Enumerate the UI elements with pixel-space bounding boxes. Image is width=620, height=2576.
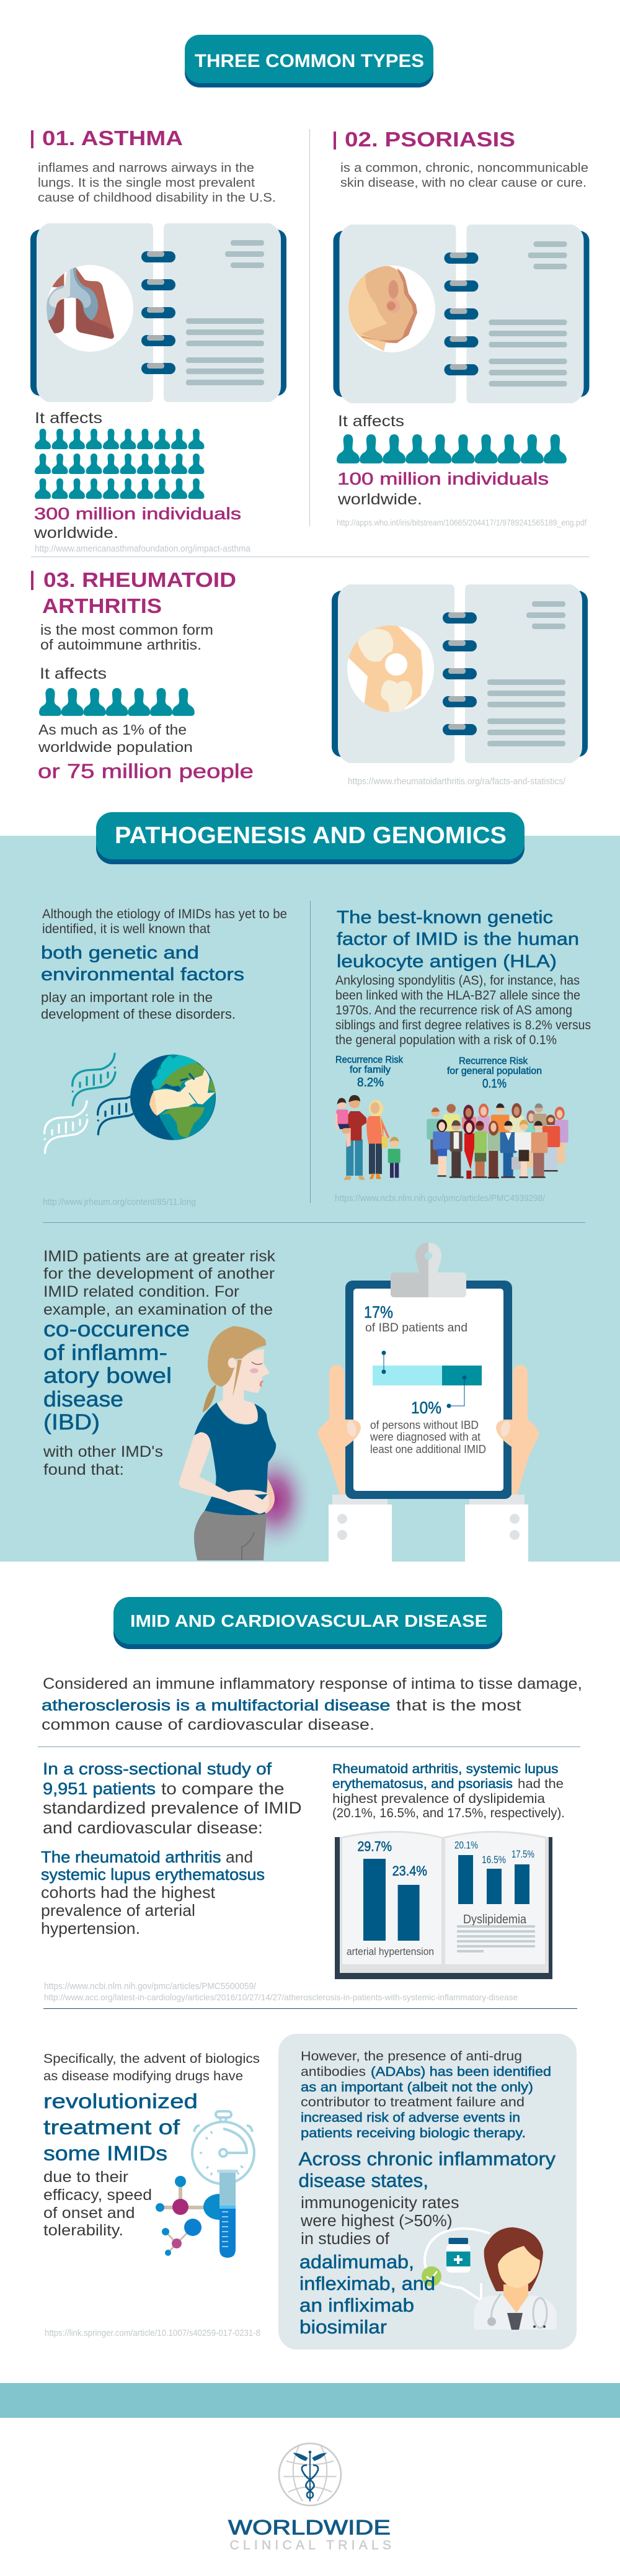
stat: 75 million people: or 75 million people: [38, 760, 254, 782]
text: it affects: It affects: [35, 409, 102, 427]
text: psoriasis description: skin disease, with no clear cause or cure.: [340, 176, 587, 190]
panel: psoriasis: [334, 128, 589, 527]
text: presence of anti-drug antibodies: antibodies: [301, 2065, 366, 2079]
icon row: 7 people: [39, 688, 195, 716]
text: presence of anti-drug antibodies: as an important (albeit not the only): [301, 2080, 533, 2095]
panel: anti-drug antibodies: [278, 2034, 577, 2350]
text block: etiology: both genetic and: [41, 943, 199, 963]
label: recurrence risk for family: Recurrence Risk: [335, 1055, 404, 1065]
text block: atherosclerosis: common cause of cardiovascular disease.: [42, 1716, 374, 1733]
text block: etiology: Although the etiology of IMIDs has yet to be: [42, 907, 287, 921]
text block: co-occurrence of ibd: with other IMD's: [43, 1443, 163, 1460]
source: springer: https://link.springer.com/article/10.1007/s40259-017-0231-8: [45, 2328, 260, 2338]
text block: co-occurrence of ibd: [43, 1248, 276, 1478]
text block: dyslipidemia finding: [332, 1761, 565, 1820]
bars: dyslipidemia: 16.5%: [482, 1854, 506, 1866]
sources: cardiovascular: https://www.ncbi.nlm.nih.gov/pmc/articles/PMC5500059/: [44, 1981, 257, 1992]
text block: biologics: some IMIDs: [43, 2142, 167, 2165]
heading: three common types: [185, 35, 433, 87]
text block: co-occurrence of ibd: IMID related condition. For: [43, 1283, 239, 1300]
text: worldwide: worldwide.: [33, 524, 118, 542]
text block: biologics: efficacy, speed: [43, 2186, 152, 2204]
label: recurrence risk for general population: [447, 1056, 542, 1091]
text block: co-occurrence of ibd: IMID patients are at greater risk: [43, 1248, 276, 1265]
bars: arterial hypertension: 23.4%: [392, 1863, 427, 1879]
icon: globe and caduceus: [279, 2443, 341, 2505]
sources: cardiovascular: http://www.acc.org/latest-in-cardiology/articles/2016/10/27/14/27/atherosclerosis-in-patients-with-systemic-inflammatory-disease: [44, 1992, 518, 2002]
icon: globe with dna strands: [45, 1053, 216, 1153]
source: ncbi hla: https://www.ncbi.nlm.nih.gov/pmc/articles/PMC4939298/: [335, 1193, 546, 1204]
label: recurrence risk for general population: Recurrence Risk: [459, 1056, 528, 1067]
text block: atherosclerosis: [42, 1675, 582, 1733]
text: as much as 1 percent: As much as 1% of the: [38, 722, 187, 738]
icon row: 30 people: [35, 429, 205, 499]
text: arthritis description: [40, 622, 213, 653]
chart: open book with bar charts: [335, 1831, 552, 1979]
text block: hla genetic factor: [335, 908, 591, 1047]
text block: hla genetic factor: factor of IMID is the human: [337, 929, 579, 949]
text block: arterial hypertension finding: hypertension.: [41, 1919, 140, 1938]
stat: 10 percent: 10%: [411, 1398, 441, 1417]
heading: 02 psoriasis: 02. PSORIASIS: [345, 128, 515, 151]
bars: arterial hypertension: [347, 1839, 434, 1957]
text: presence of anti-drug antibodies: (ADAbs) has been identified: [371, 2065, 551, 2079]
stat: 17 percent: 17%: [364, 1303, 393, 1322]
text block: dyslipidemia finding: highest prevalence of dyslipidemia: [332, 1791, 545, 1806]
bar chart: proportion: [373, 1351, 482, 1408]
text: it affects: It affects: [338, 413, 404, 430]
text: asthma description: lungs. It is the single most prevalent: [38, 176, 255, 190]
text block: hla genetic factor: Ankylosing spondylitis (AS), for instance, has: [335, 973, 580, 988]
bars: dyslipidemia: 17.5%: [512, 1848, 534, 1860]
source: jrheum: http://www.jrheum.org/content/85/11.long: [43, 1197, 196, 1207]
text: arthritis description: is the most common form: [40, 622, 213, 638]
panel: rheumatoid arthritis: [31, 568, 588, 787]
panel: asthma: [30, 127, 286, 554]
text block: biologics: of onset and: [43, 2204, 135, 2222]
bars: dyslipidemia: [454, 1839, 535, 1952]
clipboard: [345, 1243, 512, 1499]
text: drug names: infleximab, and: [299, 2273, 435, 2294]
text: it affects: It affects: [40, 665, 107, 682]
text block: biologics: Specifically, the advent of biologics: [43, 2052, 260, 2066]
label: recurrence risk for family: 8.2%: [357, 1076, 384, 1089]
illustration: crowd: [427, 1103, 569, 1179]
text: arthritis description: of autoimmune arthritis.: [40, 637, 202, 653]
label: recurrence risk for family: for family: [350, 1065, 391, 1075]
text: presence of anti-drug antibodies: patients receiving biologic therapy.: [301, 2126, 526, 2140]
illustration: stopwatch and test tube with molecules: [156, 2111, 254, 2258]
text block: atherosclerosis: that is the most: [396, 1697, 521, 1714]
text block: dyslipidemia finding: (20.1%, 16.5%, and 17.5%, respectively).: [332, 1805, 565, 1820]
illustration: woman with abdominal pain: [179, 1326, 314, 1560]
text block: biologics: as disease modifying drugs have: [43, 2069, 243, 2083]
text block: co-occurrence of ibd: atory bowel: [43, 1364, 172, 1388]
text: persons without ibd: of persons without IBD: [370, 1419, 479, 1431]
source: psoriasis: http://apps.who.int/iris/bitstream/10665/204417/1/9789241565189_eng.pdf: [337, 517, 587, 527]
text block: dyslipidemia finding: erythematosus, and psoriasis: [332, 1776, 513, 1791]
heading: imid and cardiovascular disease: [113, 1597, 502, 1649]
icon: notebook with skin: [334, 225, 589, 403]
text: presence of anti-drug antibodies: contributor to treatment failure and: [301, 2095, 525, 2109]
text block: arterial hypertension finding: The rheumatoid arthritis: [41, 1848, 221, 1866]
text: immunogenicity rates: in studies of: [301, 2230, 390, 2248]
text: immunogenicity rates: [300, 2194, 459, 2248]
text: presence of anti-drug antibodies: However, the presence of anti-drug: [301, 2049, 522, 2064]
text block: biologics: tolerability.: [43, 2222, 123, 2239]
text: asthma description: [38, 161, 276, 205]
text block: co-occurrence of ibd: example, an examination of the: [43, 1301, 273, 1318]
text: presence of anti-drug antibodies: increased risk of adverse events in: [301, 2111, 520, 2125]
bars: dyslipidemia: Dyslipidemia: [463, 1913, 527, 1926]
text: across chronic inflammatory disease states: [299, 2148, 556, 2191]
heading: imid and cardiovascular disease: IMID AND CARDIOVASCULAR DISEASE: [130, 1611, 487, 1630]
heading: 03 rheumatoid arthritis: 03. RHEUMATOID: [43, 568, 236, 591]
icon: notebook with lungs: [30, 223, 286, 402]
icon: notebook with knee: [332, 584, 588, 763]
heading: three common types: THREE COMMON TYPES: [195, 51, 424, 71]
text block: arterial hypertension finding: cohorts had the highest: [41, 1883, 216, 1902]
text: across chronic inflammatory disease states: Across chronic inflammatory: [299, 2148, 556, 2170]
heading: pathogenesis and genomics: [96, 812, 525, 864]
text block: arterial hypertension finding: prevalence of arterial: [41, 1901, 195, 1920]
stat: 100 million individuals: 100 million individuals: [337, 469, 549, 488]
heading: pathogenesis and genomics: PATHOGENESIS AND GENOMICS: [115, 823, 507, 849]
text: as much as 1 percent: worldwide population: [38, 739, 193, 755]
text block: hla genetic factor: leukocyte antigen (HLA): [337, 952, 557, 972]
text: worldwide: worldwide.: [337, 491, 422, 508]
label: recurrence risk for general population: 0.1%: [482, 1077, 507, 1091]
text: of ibd patients: of IBD patients and: [365, 1322, 467, 1335]
text block: co-occurrence of ibd: of inflamm-: [43, 1341, 167, 1365]
text block: hla genetic factor: The best-known genetic: [337, 908, 553, 928]
text block: cross-sectional study: and cardiovascular disease:: [43, 1818, 263, 1837]
illustration: hands: [317, 1365, 539, 1495]
text block: arterial hypertension finding: and: [226, 1848, 253, 1866]
text block: cross-sectional study: 9,951 patients: [43, 1779, 156, 1798]
footer band: [0, 2383, 620, 2418]
text: as much as 1 percent: [38, 722, 193, 755]
text: persons without ibd: [370, 1419, 486, 1456]
text block: hla genetic factor: the general population with a risk of 0.1%: [335, 1033, 557, 1047]
icon row: 10 people: [337, 434, 567, 463]
sources: cardiovascular: [44, 1981, 518, 2002]
bars: arterial hypertension: arterial hypertension: [347, 1946, 434, 1957]
text block: biologics: due to their: [43, 2168, 128, 2186]
text block: hla genetic factor: been linked with the HLA-B27 allele since the: [335, 988, 580, 1003]
text block: cross-sectional study: to compare the: [161, 1779, 284, 1798]
heading: 01 asthma: 01. ASTHMA: [42, 127, 183, 150]
text: across chronic inflammatory disease states: disease states,: [299, 2170, 428, 2191]
text block: co-occurrence of ibd: disease: [43, 1387, 123, 1411]
heading: 03 rheumatoid arthritis: ARTHRITIS: [42, 594, 162, 617]
text block: cross-sectional study: [43, 1760, 302, 1837]
text block: cross-sectional study: standardized prevalence of IMID: [43, 1799, 302, 1817]
label: recurrence risk for family: [335, 1055, 404, 1089]
stat: 300 million individuals: 300 million individuals: [34, 504, 241, 523]
text block: etiology: environmental factors: [41, 965, 244, 985]
text: immunogenicity rates: were highest (>50%): [300, 2212, 453, 2230]
text block: cross-sectional study: In a cross-sectional study of: [43, 1760, 272, 1778]
text block: arterial hypertension finding: systemic lupus erythematosus: [41, 1865, 265, 1884]
text: presence of anti-drug antibodies: [301, 2049, 551, 2140]
text: psoriasis description: is a common, chronic, noncommunicable: [340, 161, 588, 175]
text block: etiology: play an important role in the: [41, 990, 213, 1005]
illustration: sleeves holding clipboard: [329, 1495, 528, 1562]
logo: worldwide clinical trials: CLINICAL TRIALS: [229, 2538, 391, 2552]
heading: 03 rheumatoid arthritis: [42, 568, 236, 617]
text block: co-occurrence of ibd: co-occurence: [43, 1317, 190, 1341]
text: asthma description: inflames and narrows airways in the: [38, 161, 254, 175]
text: psoriasis description: [340, 161, 588, 190]
text block: co-occurrence of ibd: found that:: [43, 1461, 124, 1478]
text block: biologics: [43, 2052, 260, 2239]
logo: worldwide clinical trials: WORLDWIDE: [228, 2516, 391, 2539]
text block: hla genetic factor: 1970s. And the recurrence risk of AS among: [335, 1003, 572, 1017]
text: persons without ibd: were diagnosed with at: [370, 1431, 480, 1443]
text: drug names: adalimumab,: [299, 2251, 414, 2273]
text: drug names: [299, 2251, 435, 2338]
text block: etiology: development of these disorders.: [41, 1006, 236, 1022]
text block: co-occurrence of ibd: (IBD): [43, 1410, 100, 1434]
label: recurrence risk for general population: for general population: [447, 1066, 542, 1076]
bars: dyslipidemia: 20.1%: [454, 1839, 478, 1851]
text block: atherosclerosis: atherosclerosis is a multifactorial disease: [42, 1697, 391, 1714]
text block: biologics: revolutionized: [43, 2090, 198, 2113]
text: drug names: biosimilar: [299, 2316, 387, 2338]
text: asthma description: cause of childhood disability in the U.S.: [38, 190, 276, 205]
text: immunogenicity rates: immunogenicity rates: [301, 2194, 459, 2212]
source: asthma: http://www.americanasthmafoundation.org/impact-asthma: [35, 543, 251, 554]
bars: arterial hypertension: 29.7%: [357, 1839, 392, 1854]
text block: biologics: treatment of: [43, 2116, 180, 2139]
illustration: doctor with medicine: [422, 2227, 557, 2330]
text block: etiology: identified, it is well known that: [42, 922, 210, 936]
text block: etiology: [41, 907, 287, 1022]
text: persons without ibd: least one additional IMID: [370, 1443, 486, 1456]
text block: dyslipidemia finding: had the: [518, 1776, 564, 1791]
panel: pathogenesis and genomics background: [0, 836, 620, 1562]
logo: worldwide clinical trials: [228, 2443, 391, 2552]
source: arthritis: https://www.rheumatoidarthritis.org/ra/facts-and-statistics/: [348, 776, 566, 787]
text block: co-occurrence of ibd: for the development of another: [43, 1265, 275, 1282]
text block: hla genetic factor: siblings and first degree relatives is 8.2% versus: [335, 1018, 591, 1032]
text: drug names: an infliximab: [299, 2294, 414, 2316]
illustration: family: [335, 1095, 401, 1180]
text block: atherosclerosis: Considered an immune inflammatory response of intima to tisse damage,: [43, 1675, 582, 1693]
text block: dyslipidemia finding: Rheumatoid arthritis, systemic lupus: [332, 1761, 558, 1776]
text block: arterial hypertension finding: [41, 1848, 265, 1938]
